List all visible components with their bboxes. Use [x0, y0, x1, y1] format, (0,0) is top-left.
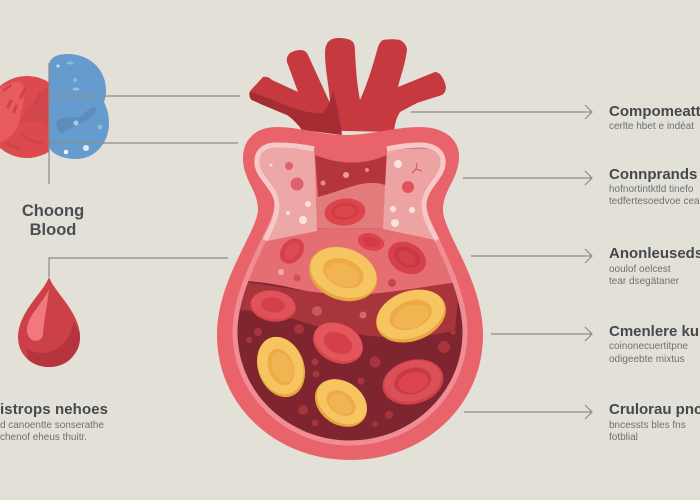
text block: Anonleuseds: tear dsegätaner [609, 276, 680, 287]
arrow: component 4 [491, 327, 592, 341]
plasma half [49, 54, 109, 159]
text block: Connprands [609, 166, 700, 207]
text block: Cmenlere: coinonecuertitpne [609, 341, 688, 352]
icon: blood drop [18, 277, 80, 367]
text block: lower left: istrops nehoes [0, 401, 108, 418]
text block: Cmenlere [609, 323, 700, 365]
text block: Connprands: Connprands [609, 166, 697, 183]
red cell half [0, 76, 48, 158]
icon: blood cell and plasma [0, 54, 109, 159]
arrow: component 3 [471, 249, 592, 263]
arrow: component 5 [464, 405, 592, 419]
flask contents [238, 148, 462, 440]
bubbles [246, 160, 456, 427]
text block: Cmenlere: odigeebte mixtus [609, 354, 685, 365]
text block: Crulorau: Crulorau pnc [609, 401, 700, 418]
text block: Crulorau [609, 401, 700, 443]
flask inner wall [235, 145, 465, 443]
text block: Anonleuseds: ooulof oelcest [609, 264, 671, 275]
text block: Compomeatt: cerlte hbet e indéat [609, 121, 694, 132]
yellow blood cells [249, 238, 453, 437]
text block: Crulorau: bncessts bles fns [609, 420, 686, 431]
heading: Choong Blood [22, 202, 84, 239]
leader lines: left [49, 63, 240, 277]
text block: lower left: chenof eheus thuitr. [0, 432, 87, 443]
flask body [217, 127, 483, 460]
flask outer wall [217, 127, 483, 460]
text block: lower left [0, 401, 108, 443]
arrow: component 1 [411, 105, 592, 119]
text block: Compomeatt: Compomeatt [609, 103, 700, 120]
red blood cells [248, 197, 449, 411]
text block: Crulorau: fotblial [609, 432, 638, 443]
arrow: component 2 [463, 171, 592, 185]
text block: Anonleuseds [609, 245, 700, 287]
text block: Compomeatt [609, 103, 700, 132]
text block: lower left: d canoentte sonserathe [0, 420, 104, 431]
text block: Connprands: hofnortintktld tinefo [609, 184, 694, 195]
heading: Choong Blood: Choong [22, 202, 84, 220]
heading: Choong Blood: Blood [30, 221, 76, 239]
vessels at top of flask [249, 38, 446, 135]
